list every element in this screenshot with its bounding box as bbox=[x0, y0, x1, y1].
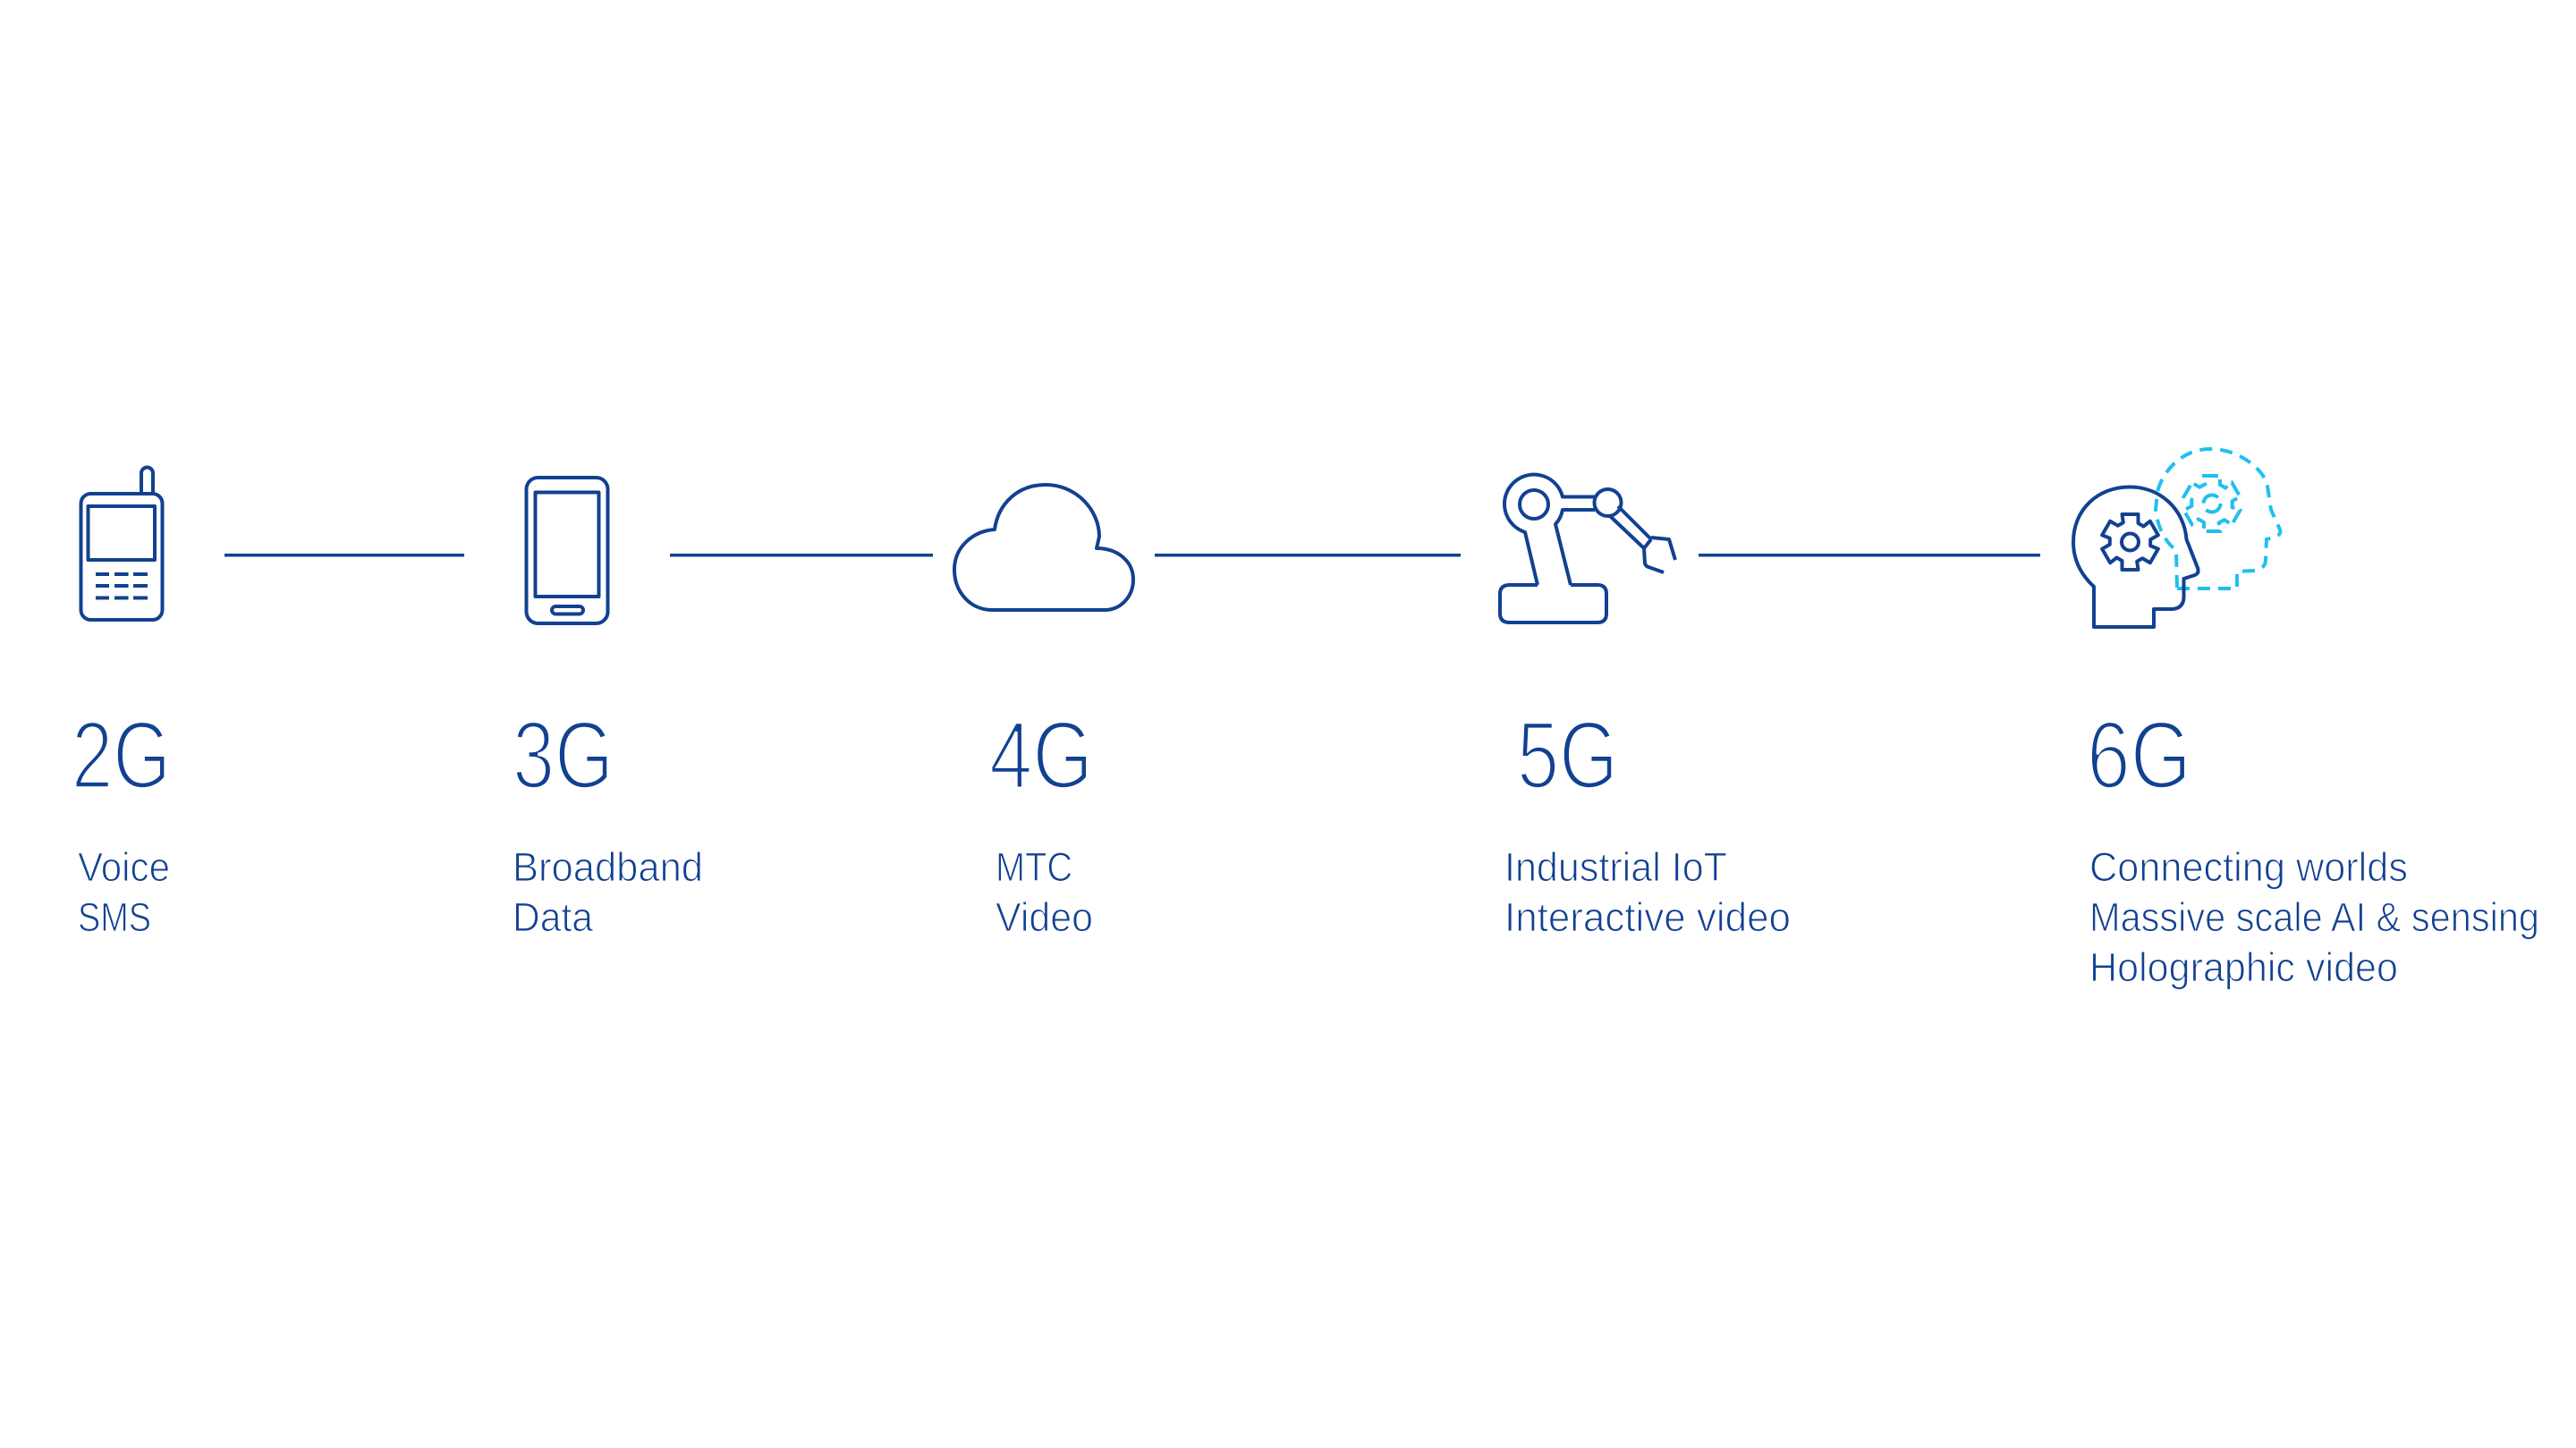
icon: 6G head with gear bbox=[2073, 487, 2199, 627]
text block: 2G uses bbox=[78, 844, 170, 940]
icon: 4G cloud bbox=[954, 485, 1133, 610]
heading: 2G: 2G bbox=[72, 701, 171, 809]
connector line: 5G to 6G bbox=[1699, 554, 2040, 556]
text block: 6G uses: Holographic video bbox=[2089, 944, 2398, 990]
heading: 5G: 5G bbox=[1517, 701, 1618, 809]
text block: 4G uses: MTC bbox=[996, 844, 1072, 890]
text block: 5G uses bbox=[1504, 844, 1791, 940]
heading: 4G: 4G bbox=[989, 701, 1093, 809]
icon: 6G dashed digital-twin head with gear bbox=[2156, 449, 2280, 589]
text block: 2G uses: Voice bbox=[78, 844, 170, 890]
text block: 3G uses bbox=[513, 844, 703, 940]
text block: 6G uses: Massive scale AI & sensing bbox=[2089, 894, 2539, 940]
text block: 4G uses bbox=[996, 844, 1093, 940]
text block: 5G uses: Interactive video bbox=[1504, 894, 1791, 940]
heading: 6G: 6G bbox=[2087, 701, 2191, 809]
text block: 3G uses: Data bbox=[513, 894, 594, 940]
text block: 4G uses: Video bbox=[996, 894, 1093, 940]
icon: 2G feature phone bbox=[80, 468, 163, 620]
text block: 3G uses: Broadband bbox=[513, 844, 703, 890]
connector line: 2G to 3G bbox=[225, 554, 464, 556]
connector line: 4G to 5G bbox=[1155, 554, 1461, 556]
text block: 6G uses bbox=[2089, 844, 2539, 990]
heading: 3G: 3G bbox=[513, 701, 614, 809]
connector line: 3G to 4G bbox=[670, 554, 933, 556]
text block: 2G uses: SMS bbox=[78, 894, 151, 940]
icon: 3G smartphone bbox=[526, 478, 608, 623]
text block: 5G uses: Industrial IoT bbox=[1504, 844, 1727, 890]
icon: 5G robot arm bbox=[1500, 475, 1675, 622]
text block: 6G uses: Connecting worlds bbox=[2089, 844, 2408, 890]
